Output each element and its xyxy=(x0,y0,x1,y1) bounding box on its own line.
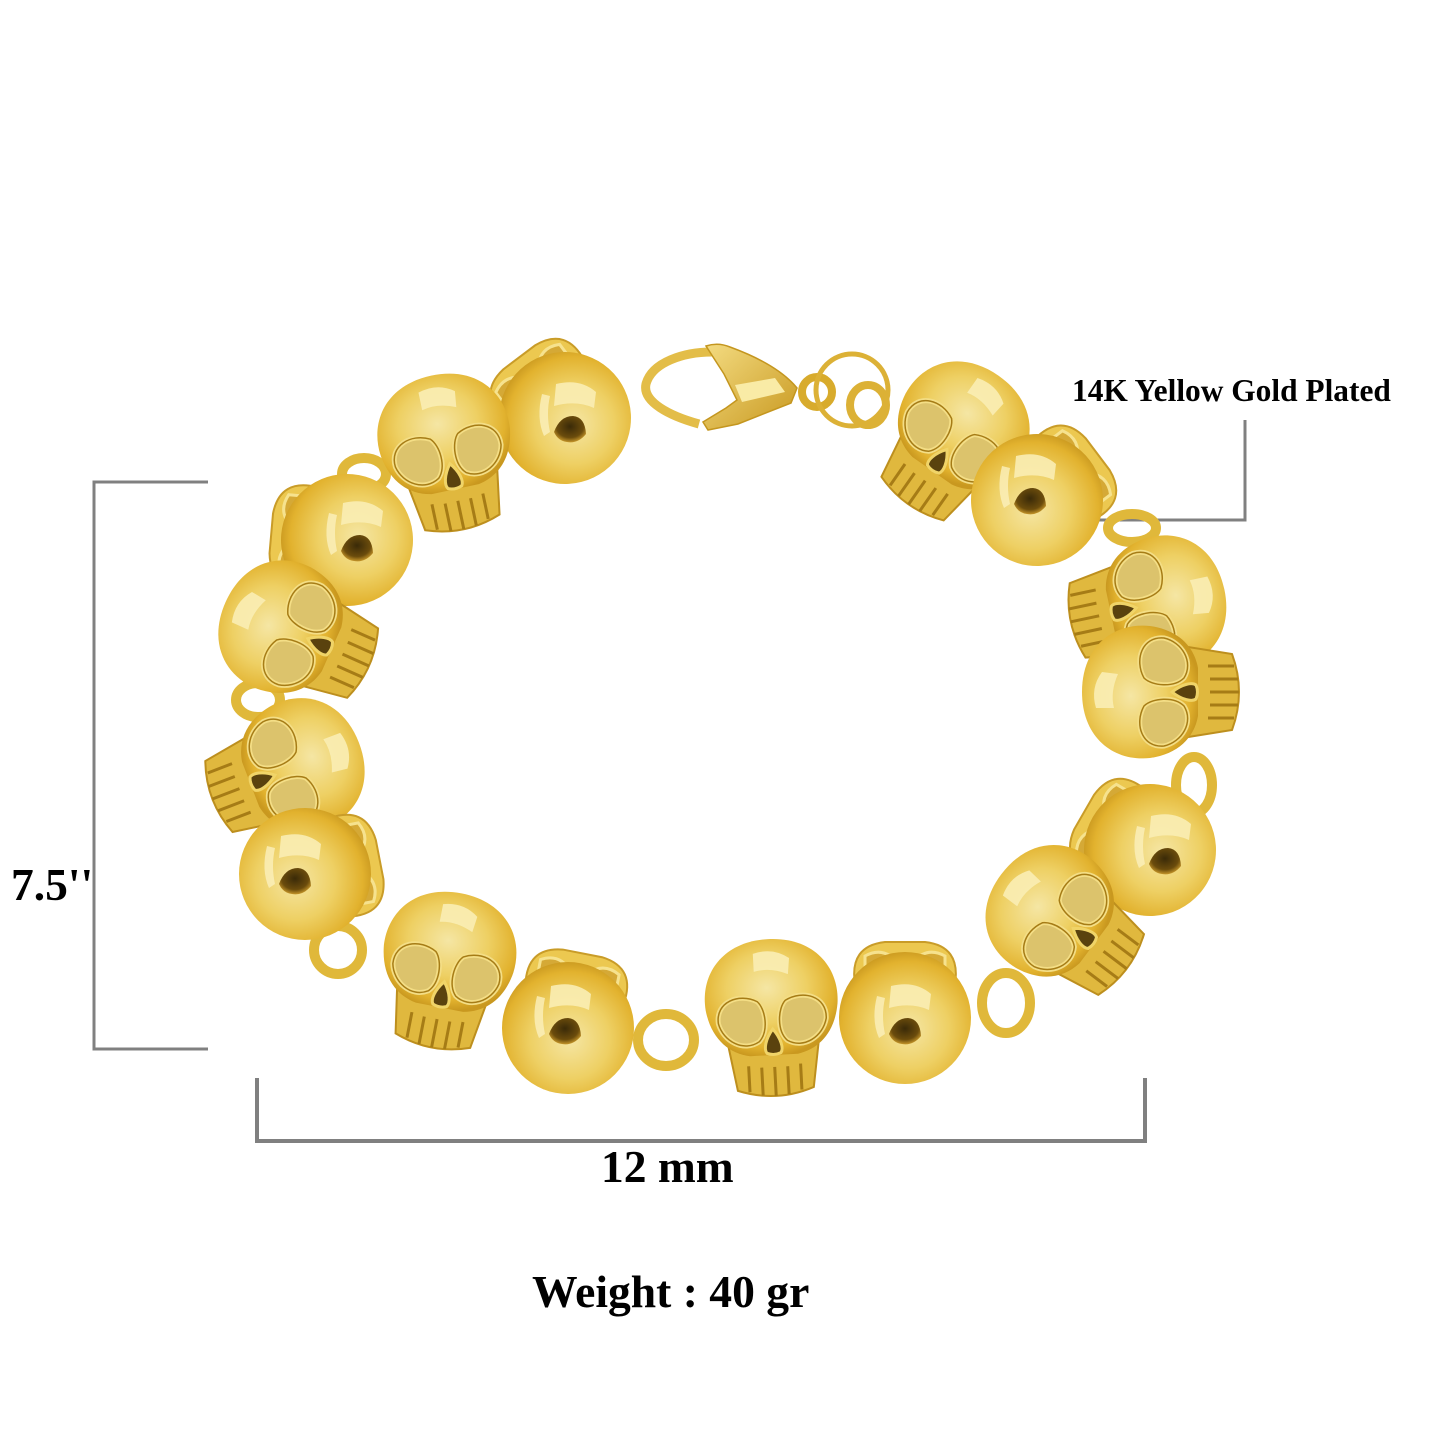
bead: top right turned skull xyxy=(945,402,1137,592)
callout leader line xyxy=(1050,420,1245,520)
bead: bottom centre turned skull xyxy=(839,942,971,1084)
clasp gate arc xyxy=(646,352,712,424)
bead: bottom centre skull xyxy=(702,936,843,1099)
skull bead pairs xyxy=(189,318,1240,1105)
bead: bottom turned skull xyxy=(491,941,647,1105)
shine: bottom centre turned skull xyxy=(874,984,931,1044)
shine: bottom turned skull xyxy=(534,984,591,1044)
shine: lower right turned skull xyxy=(1134,814,1191,874)
shine: left turned skull xyxy=(326,501,383,561)
bead: top left turned skull xyxy=(467,318,657,510)
bead: right lower skull xyxy=(1082,626,1239,758)
width label: 12 mm xyxy=(601,1141,734,1192)
connecting rings xyxy=(236,458,1212,1066)
small ring xyxy=(802,377,832,407)
bead: left turned skull xyxy=(266,468,419,612)
bead: lower right turned skull xyxy=(1051,755,1240,940)
clasp xyxy=(646,344,888,430)
bead: right upper skull xyxy=(1057,524,1238,687)
clasp highlight xyxy=(735,378,785,402)
shine: lower left turned skull xyxy=(264,834,321,894)
bead: bottom left skull xyxy=(366,881,527,1060)
bead: top right skull xyxy=(854,338,1053,542)
end ring xyxy=(850,385,886,425)
bead: lower left turned skull xyxy=(228,795,392,951)
shine: top left turned skull xyxy=(539,382,596,442)
shine: top right turned skull xyxy=(999,454,1056,514)
bead: lower left skull xyxy=(189,681,383,861)
bead: top left skull xyxy=(366,362,529,543)
large ring xyxy=(816,354,888,426)
bead: lower right skull xyxy=(961,821,1167,1022)
plating label: 14K Yellow Gold Plated xyxy=(1072,373,1391,408)
lobster clasp body xyxy=(703,344,797,430)
width dimension bracket xyxy=(257,1078,1145,1141)
height label: 7.5'' xyxy=(11,859,93,910)
weight label: Weight : 40 gr xyxy=(532,1266,809,1317)
bead: left skull xyxy=(199,541,396,727)
height dimension bracket xyxy=(94,482,208,1049)
bracelet xyxy=(189,318,1240,1105)
